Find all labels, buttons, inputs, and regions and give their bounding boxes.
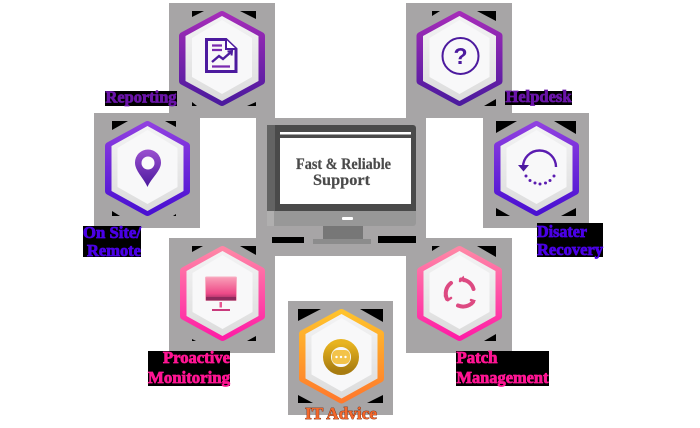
illustration: desktop monitor [267, 125, 416, 244]
label: Patch Management: Patch [456, 348, 498, 367]
label: Proactive Monitoring [148, 348, 231, 387]
panel: IT Advice [288, 301, 393, 423]
panel: central monitor backdrop [256, 118, 426, 256]
icon: map pin [135, 150, 161, 187]
monitor screen [280, 138, 411, 204]
monitor title: Fast & Reliable [296, 156, 391, 173]
monitor title: Support [313, 172, 371, 189]
icon: question mark: ? [453, 43, 468, 69]
icon: question mark [442, 38, 478, 74]
panel: Helpdesk [406, 3, 572, 118]
monitor bezel [267, 125, 416, 211]
icon: report document [206, 40, 236, 72]
monitor title [296, 156, 391, 189]
label: Patch Management: Management [456, 368, 549, 387]
label: On Site / Remote: On Site/ [83, 223, 141, 242]
label: Disaster Recovery: Recovery [537, 240, 604, 259]
panel: Patch Management [406, 238, 549, 387]
label: On Site / Remote: Remote [87, 241, 141, 260]
label: Proactive Monitoring: Monitoring [148, 368, 231, 387]
label: Disaster Recovery: Disater [537, 222, 587, 241]
icon: pink monitor [206, 277, 236, 311]
panel: On Site / Remote [83, 113, 200, 260]
panel: Proactive Monitoring [148, 238, 275, 387]
label: Reporting: Reporting [106, 88, 177, 106]
label: Helpdesk: Helpdesk [506, 87, 572, 106]
label: Patch Management [456, 348, 549, 387]
panel: Disaster Recovery [483, 113, 604, 259]
label: On Site / Remote [83, 223, 141, 260]
label: Proactive Monitoring: Proactive [163, 348, 230, 367]
panel: Reporting [105, 3, 275, 118]
label: IT Advice: IT Advice [305, 404, 377, 423]
icon: patch cycle arrows [445, 278, 474, 307]
monitor stand [323, 226, 363, 239]
monitor chin [267, 211, 416, 226]
icon: recovery arrow [518, 150, 556, 186]
label: Disaster Recovery [537, 222, 604, 259]
icon: chat bubble ring [327, 343, 355, 371]
